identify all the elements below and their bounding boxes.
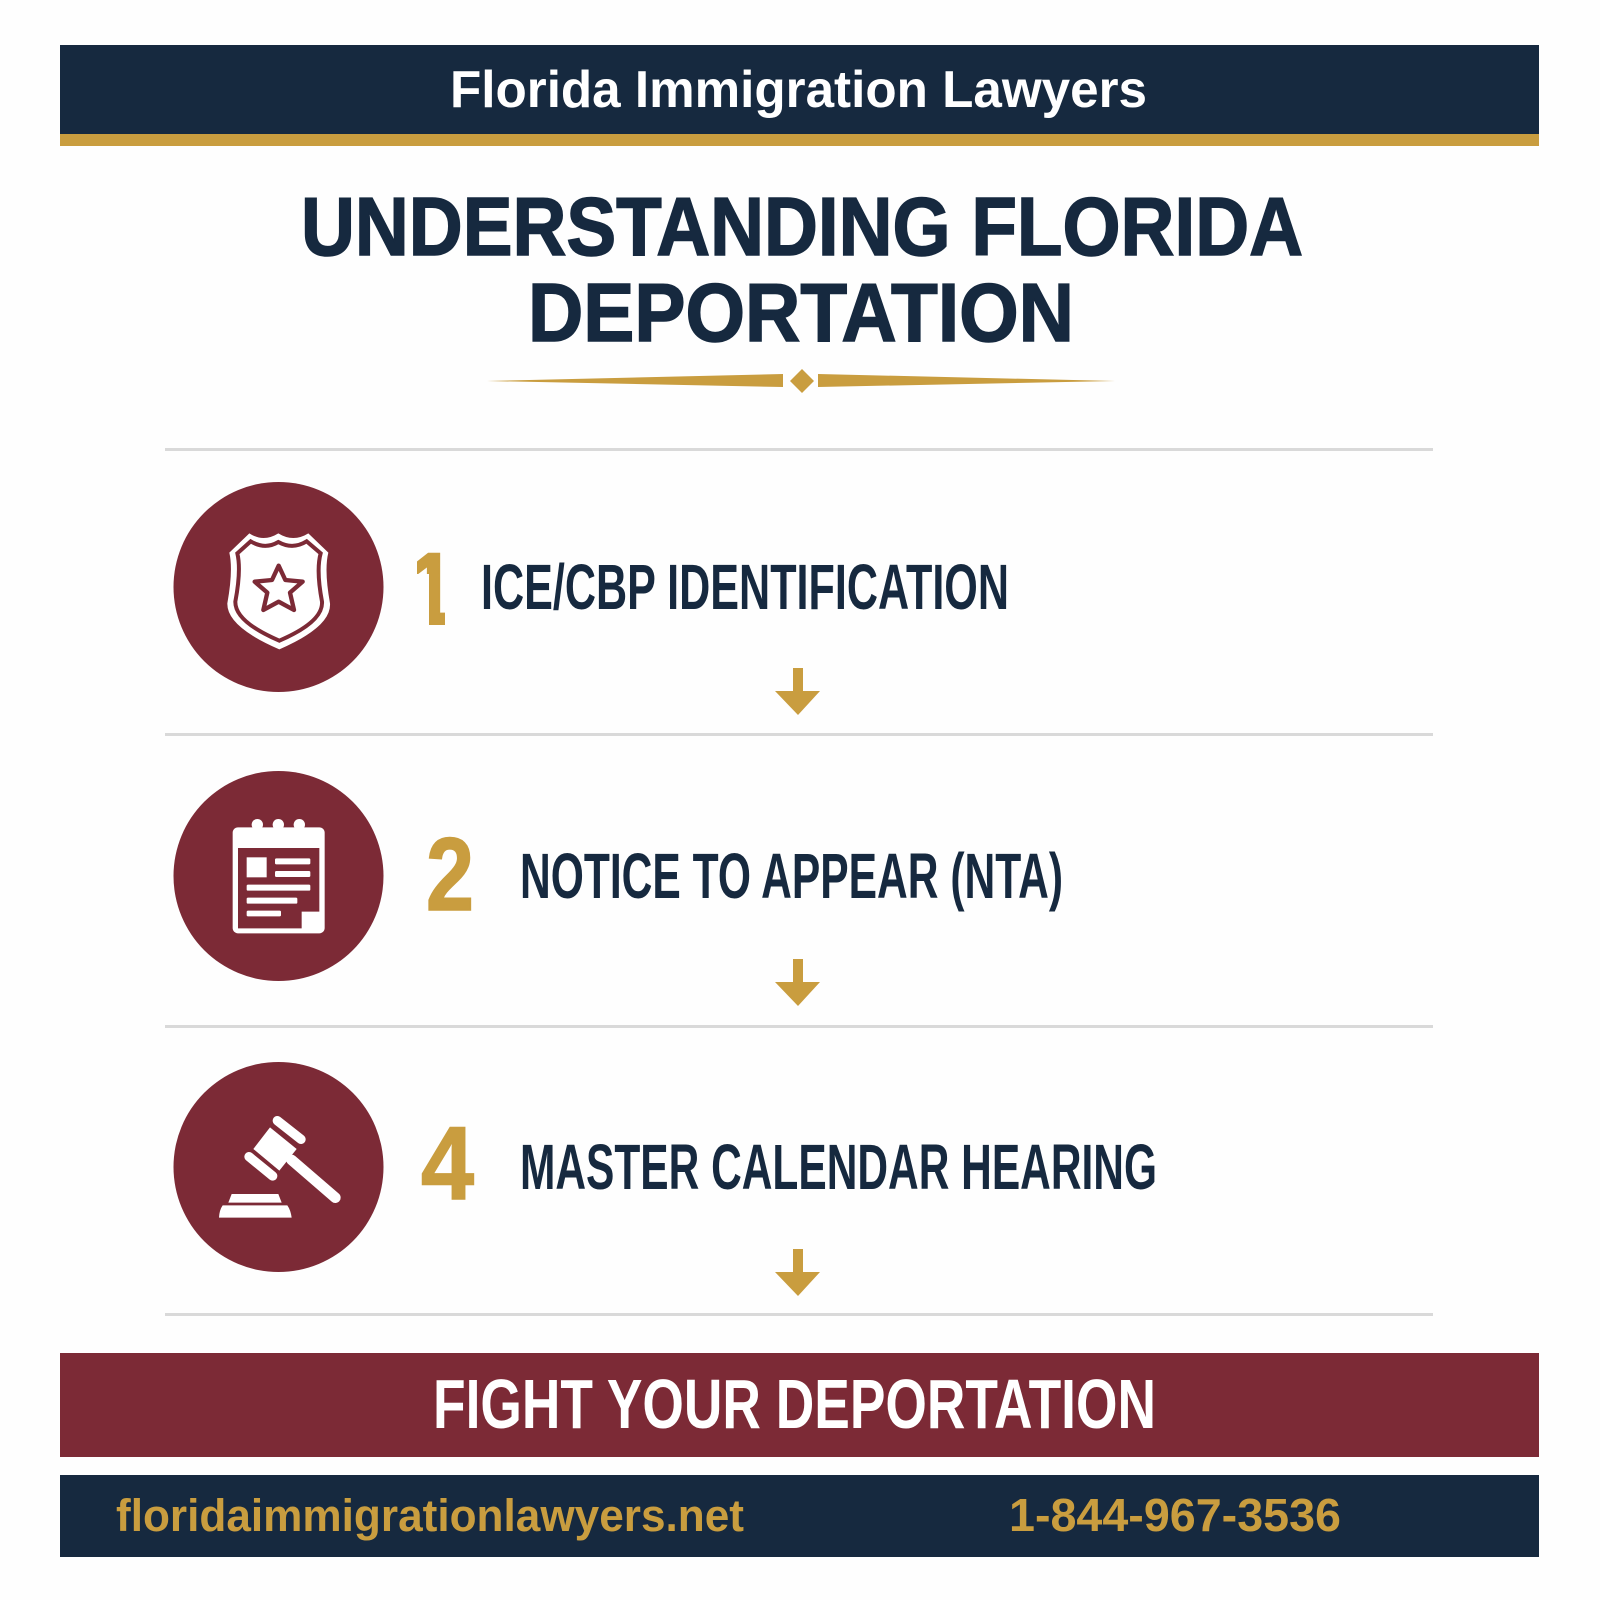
header banner: Florida Immigration Lawyers [450,61,1147,119]
step number 2: 2 [426,817,474,933]
icon: police badge [174,482,384,692]
arrow 3 [775,1249,820,1296]
footer contact bar [60,1475,1539,1557]
call to action banner [60,1353,1539,1457]
arrow 1 [775,668,820,715]
step label 3: MASTER CALENDAR HEARING [520,1131,1157,1203]
phone: 1-844-967-3536 [1009,1489,1341,1541]
icon: notice document [174,771,384,981]
step 1 [174,482,1009,692]
step 2 [174,771,1063,981]
step number 1: 1 [408,532,455,646]
title [301,180,1303,359]
step label 1: ICE/CBP IDENTIFICATION [481,551,1009,623]
step number 4: 4 [421,1106,474,1222]
header banner [60,45,1539,146]
website: floridaimmigrationlawyers.net [116,1490,744,1541]
title: UNDERSTANDING FLORIDA [301,180,1303,273]
title ornament divider [487,369,1115,393]
step label 2: NOTICE TO APPEAR (NTA) [520,840,1063,912]
icon: gavel [174,1062,384,1272]
step 3 [174,1062,1157,1272]
arrow 2 [775,959,820,1006]
title: DEPORTATION [528,266,1074,359]
call to action banner: FIGHT YOUR DEPORTATION [433,1365,1156,1443]
